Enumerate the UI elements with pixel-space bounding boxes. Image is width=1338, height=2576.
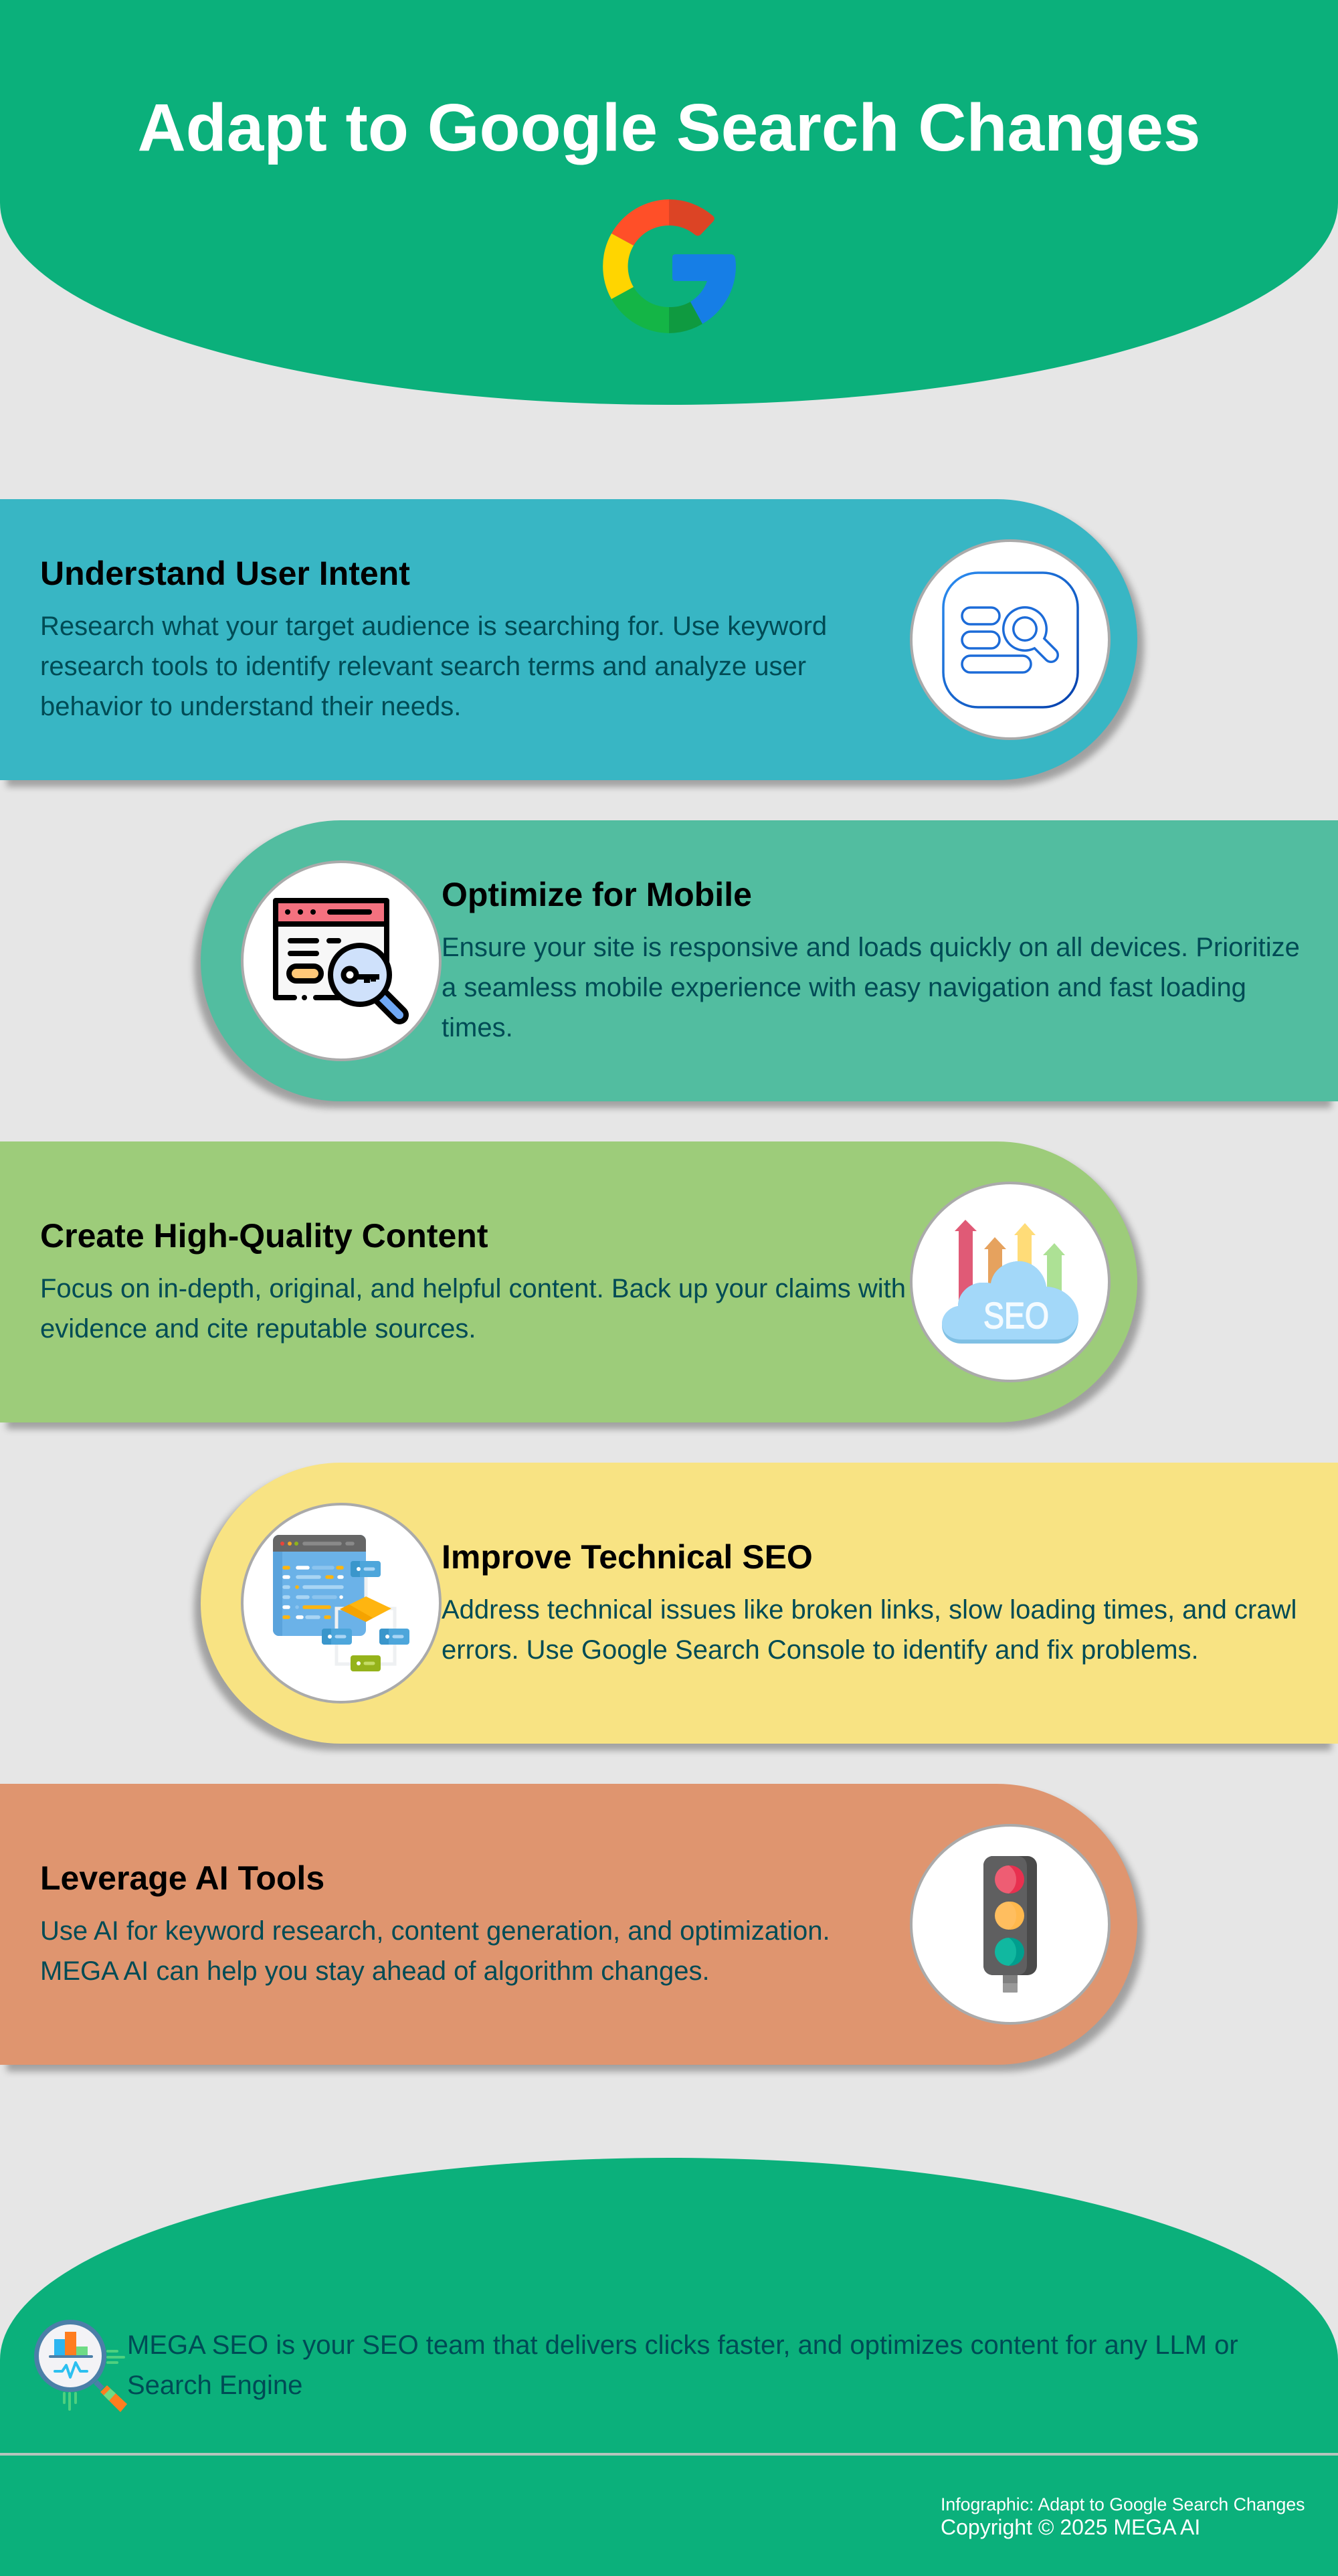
body text	[40, 1274, 906, 1344]
footer text: MEGA SEO is your SEO team that delivers clicks faster, and optimizes content for any LLM or	[127, 2330, 1238, 2360]
title: Adapt to Google Search Changes	[137, 90, 1201, 165]
body text	[442, 1595, 1297, 1665]
panel: optimize for mobile	[201, 820, 1338, 1101]
icon: Google G logo	[603, 199, 736, 333]
icon: traffic light	[910, 1824, 1111, 2025]
copyright block: Copyright © 2025 MEGA AI	[941, 2515, 1200, 2539]
icon: SEO cloud with arrows: SEO	[983, 1295, 1049, 1336]
footer text: Search Engine	[127, 2371, 302, 2400]
body text	[40, 612, 827, 721]
copyright block	[941, 2494, 1305, 2539]
body text: Research what your target audience is searching for. Use keyword	[40, 612, 827, 641]
icon: search list in rounded square	[910, 539, 1111, 740]
body text: evidence and cite reputable sources.	[40, 1314, 476, 1344]
panel: create high-quality content	[0, 1141, 1137, 1422]
icon: code window with flowchart	[241, 1503, 442, 1704]
heading: Improve Technical SEO	[442, 1538, 813, 1576]
body text	[442, 933, 1300, 1042]
body text: Use AI for keyword research, content generation, and optimization.	[40, 1916, 830, 1946]
body text	[40, 1916, 830, 1986]
body text: behavior to understand their needs.	[40, 692, 461, 721]
heading: Leverage AI Tools	[40, 1859, 324, 1897]
panel: leverage AI tools	[0, 1784, 1137, 2065]
heading: Optimize for Mobile	[442, 876, 752, 913]
panel: improve technical SEO	[201, 1463, 1338, 1744]
body text: times.	[442, 1013, 513, 1042]
body text: Focus on in-depth, original, and helpful content. Back up your claims with	[40, 1274, 906, 1303]
body text: errors. Use Google Search Console to identify and fix problems.	[442, 1635, 1199, 1665]
footer panel	[0, 2158, 1338, 2576]
icon: SEO cloud with arrows	[910, 1182, 1111, 1382]
body text: Ensure your site is responsive and loads quickly on all devices. Prioritize	[442, 933, 1300, 962]
heading: Understand User Intent	[40, 555, 410, 592]
icon: browser window with key magnifier	[241, 860, 442, 1061]
body text: Address technical issues like broken links, slow loading times, and crawl	[442, 1595, 1297, 1625]
body text: research tools to identify relevant search terms and analyze user	[40, 652, 806, 681]
body text: a seamless mobile experience with easy navigation and fast loading	[442, 973, 1246, 1002]
copyright block: Infographic: Adapt to Google Search Changes	[941, 2494, 1305, 2514]
heading: Create High-Quality Content	[40, 1217, 488, 1255]
icon: magnifier with chart	[34, 2320, 127, 2412]
header panel	[0, 0, 1338, 405]
body text: MEGA AI can help you stay ahead of algorithm changes.	[40, 1956, 710, 1986]
footer text	[127, 2330, 1238, 2400]
panel: understand user intent	[0, 499, 1137, 780]
